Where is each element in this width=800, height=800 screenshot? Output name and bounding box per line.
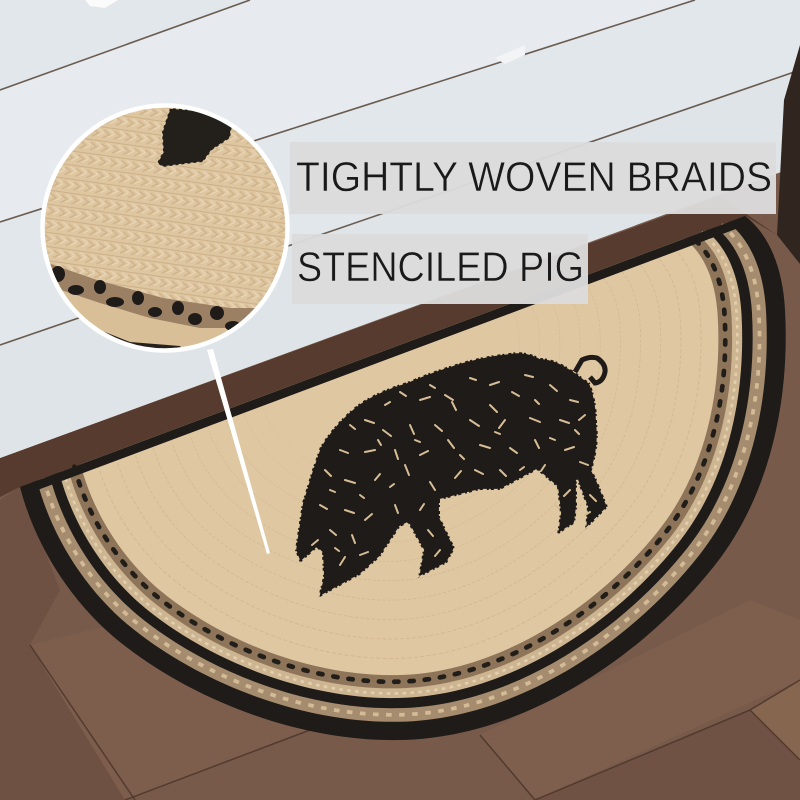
dark wooden post: [777, 45, 800, 264]
rough pig edge: [295, 352, 608, 598]
pig body silhouette: [295, 352, 608, 598]
inner black ring: [50, 227, 753, 708]
lens outer edge: [103, 331, 181, 348]
callout pointer line: [207, 349, 270, 554]
dark floor band behind rug: [0, 196, 777, 497]
braided half-round rug: [20, 216, 786, 740]
straight black edge: [20, 216, 745, 487]
label: tightly woven braids: [290, 142, 776, 214]
label: stenciled pig: STENCILED PIG: [297, 243, 584, 290]
black stitches: [74, 236, 725, 682]
lens braid border: [62, 290, 228, 347]
magnified braid lens: [40, 106, 288, 360]
label: stenciled pig: [292, 234, 588, 304]
light braid ring: [59, 231, 742, 698]
mottled brown ring: [68, 234, 732, 688]
jute field: [81, 239, 718, 675]
tan braid ring: [37, 222, 767, 722]
concentric braid rows: [96, 244, 701, 658]
lens texture: [43, 106, 287, 350]
white plank wall: [0, 0, 800, 458]
lens white ring: [42, 106, 288, 350]
light braid flecks: [63, 232, 737, 693]
lens black stitches: [51, 266, 241, 331]
tan braid flecks: [44, 225, 760, 715]
pig tail: [575, 357, 605, 383]
label: tightly woven braids: TIGHTLY WOVEN BRAIDS: [296, 153, 772, 200]
lens pig fragment: [157, 108, 232, 167]
rug outer black border: [20, 216, 786, 740]
distressed speckles: [312, 375, 596, 565]
stenciled pig: [295, 352, 608, 598]
